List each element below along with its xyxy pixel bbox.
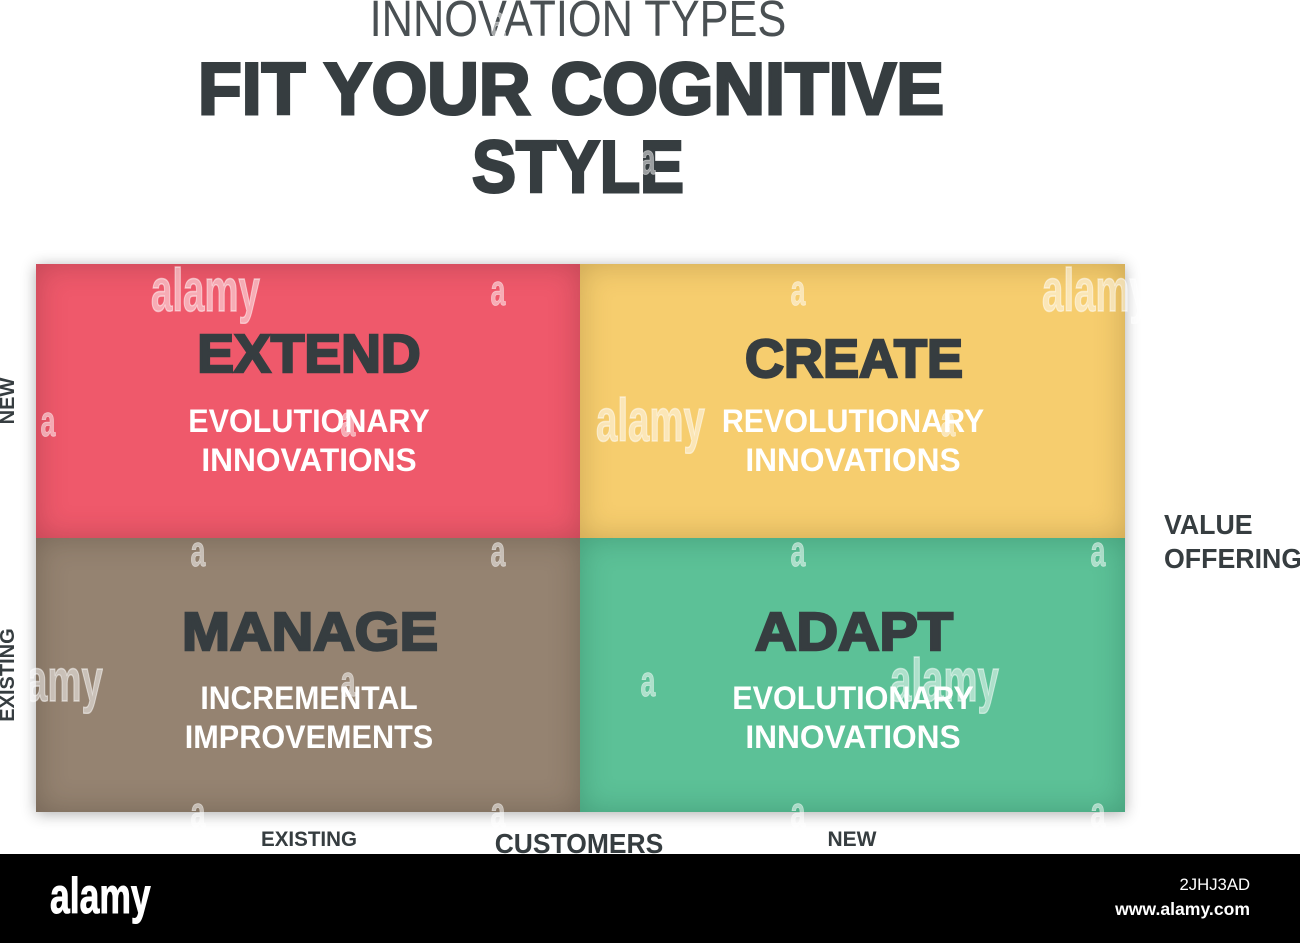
watermark tiles: a: [191, 527, 205, 576]
title: FIT YOUR COGNITIVE: [198, 49, 944, 130]
axis title: value offering: VALUE: [1164, 509, 1253, 540]
axis title: value offering: OFFERING: [1164, 542, 1300, 574]
watermark tiles: a: [341, 397, 355, 446]
watermark tiles: a: [41, 397, 55, 446]
footer url: www.alamy.com: [1115, 899, 1250, 919]
watermark tiles: a: [791, 527, 805, 576]
panel: extend: [36, 264, 580, 538]
text: revolutionary innovations: REVOLUTIONARY: [721, 403, 984, 439]
watermark tiles: a: [641, 657, 655, 706]
text: revolutionary innovations: [721, 403, 984, 478]
watermark tiles: a: [1091, 527, 1105, 576]
footer logo: alamy: alamy: [50, 868, 151, 924]
watermark: alamy: alamy: [890, 647, 999, 714]
watermark: alamy: alamy: [596, 387, 705, 454]
panel: adapt: [580, 538, 1125, 812]
watermark tiles: a: [491, 527, 505, 576]
watermark tiles: a: [941, 397, 955, 446]
panel: create: [580, 264, 1125, 538]
footer bar: [0, 854, 1300, 943]
text: evolutionary innovations: [732, 680, 974, 755]
heading: extend: EXTEND: [197, 324, 421, 384]
text: evolutionary innovations: EVOLUTIONARY: [188, 403, 429, 439]
heading: adapt: ADAPT: [755, 602, 953, 662]
text: incremental improvements: [185, 680, 433, 755]
x axis label: existing: EXISTING: [260, 828, 357, 851]
x axis label: new: NEW: [828, 828, 876, 851]
image id: 2JHJ3AD: [1180, 875, 1250, 894]
watermark: alamy: alamy: [151, 257, 260, 324]
text: evolutionary innovations: INNOVATIONS: [201, 442, 416, 478]
watermark tiles: a: [1091, 788, 1105, 837]
text: revolutionary innovations: INNOVATIONS: [745, 442, 960, 478]
text: evolutionary innovations: INNOVATIONS: [745, 719, 960, 755]
watermark tiles: a: [641, 135, 655, 184]
quadrant matrix: [36, 264, 1125, 812]
axis title: value offering: [1164, 509, 1300, 574]
watermark tiles: a: [791, 788, 805, 837]
panel: manage: [36, 538, 580, 812]
heading: create: CREATE: [745, 329, 963, 389]
watermark tiles: a: [791, 266, 805, 315]
text: incremental improvements: IMPROVEMENTS: [185, 719, 433, 755]
title: STYLE: [472, 127, 684, 208]
watermark tiles: a: [491, 266, 505, 315]
watermark: alamy: alamy: [1042, 257, 1151, 324]
axis title: customers: CUSTOMERS: [495, 828, 663, 859]
watermark tiles: a: [491, 788, 505, 837]
watermark tiles: a: [341, 657, 355, 706]
title: [198, 49, 944, 208]
heading: manage: MANAGE: [181, 602, 438, 662]
text: evolutionary innovations: EVOLUTIONARY: [732, 680, 973, 716]
text: incremental improvements: INCREMENTAL: [200, 680, 418, 716]
text: evolutionary innovations: [188, 403, 430, 478]
watermark tiles: a: [191, 788, 205, 837]
